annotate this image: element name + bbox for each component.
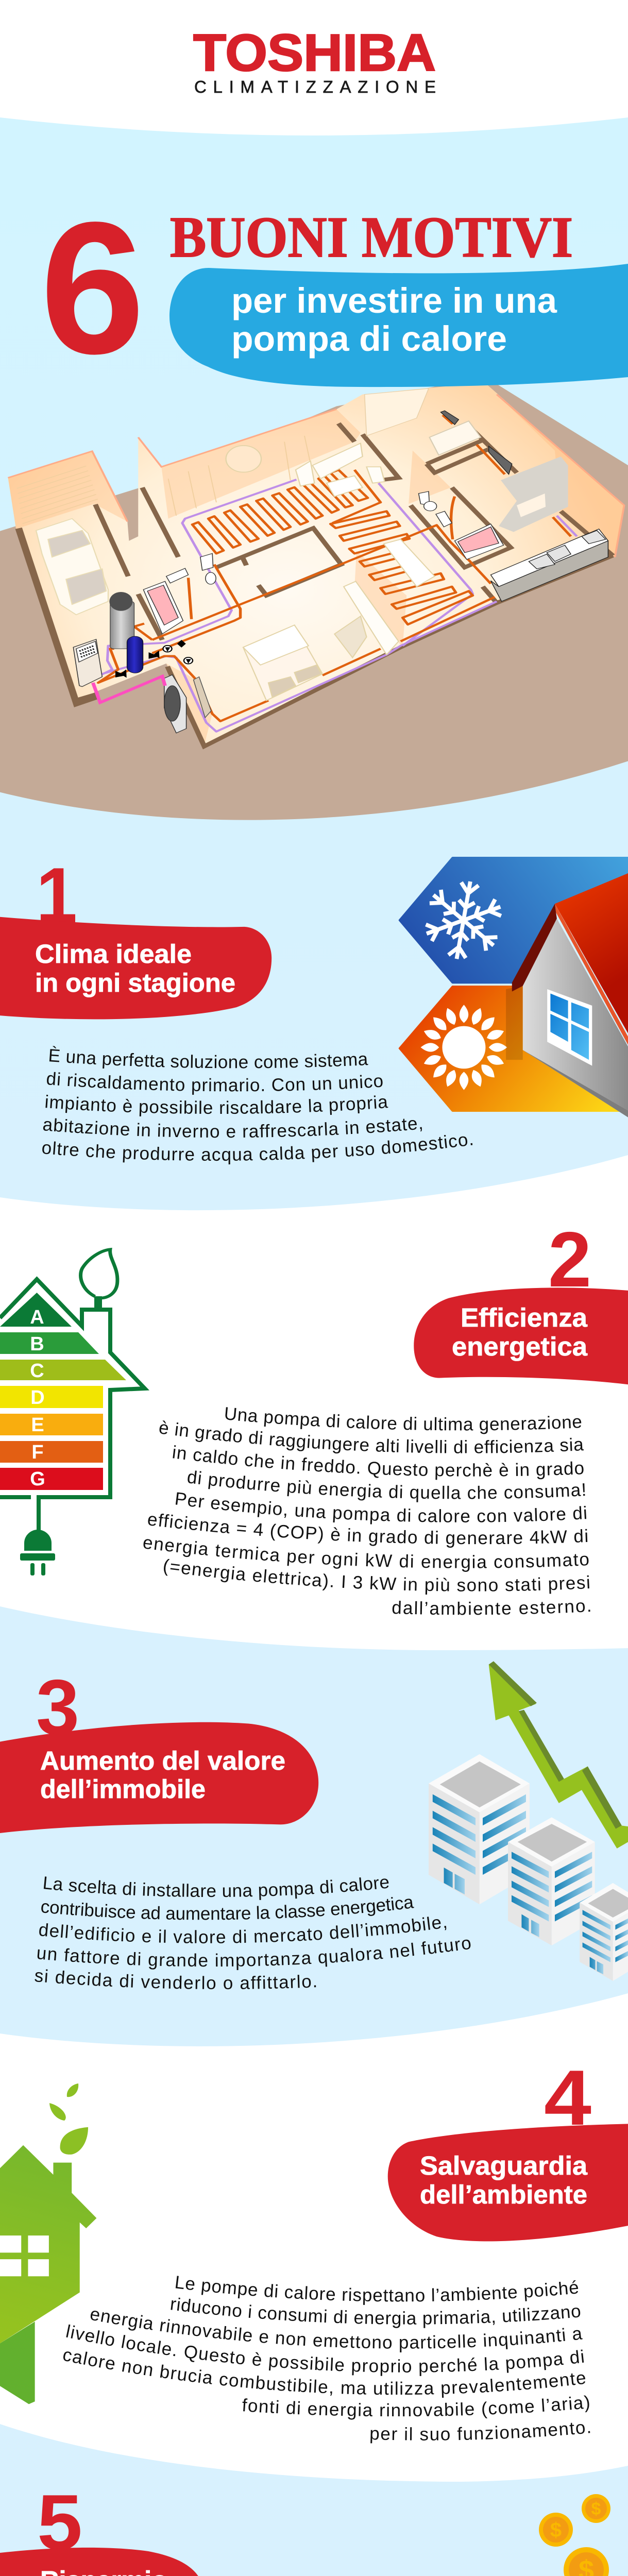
body text: reason 2: in caldo che in freddo. Questo perchè è in grado [173, 1445, 584, 1480]
radiator [194, 677, 211, 718]
orange pipes [98, 415, 571, 721]
body text: reason 4: energia rinnovabile e non emettono particelle inquinanti a [91, 2311, 583, 2352]
body text: reason 1: oltre che produrre acqua calda per uso domestico. [42, 1135, 473, 1164]
house [506, 873, 628, 1117]
body text: reason 3: si decida di venderlo o affittarlo. [35, 1969, 316, 1990]
snowflake [419, 875, 508, 965]
heading banner: aumento del valore: Aumento del valore [40, 1746, 285, 1775]
title: buoni motivi: BUONI MOTIVI [170, 206, 573, 269]
icon: house with winter and summer [400, 858, 628, 1117]
logo: Toshiba Climatizzazione: CLIMATIZZAZIONE [194, 77, 436, 96]
panel: reason 5 [0, 2479, 628, 2576]
floor and walls [8, 383, 624, 745]
subtitle banner: pompa di calore [231, 319, 507, 359]
body text: reason 2: energia termica per ogni kW di energia consumato [143, 1539, 588, 1572]
body text: reason 1: È una perfetta soluzione come sistema [49, 1046, 368, 1069]
body text: reason 1: impianto è possibile riscaldare la propria [45, 1094, 388, 1116]
building 2 [508, 1817, 595, 1945]
body text: reason 2 [143, 1407, 590, 1615]
bathrooms [143, 492, 503, 634]
heading banner: risparmio in bolletta [0, 2548, 203, 2576]
logo: Toshiba Climatizzazione: TOSHIBA [193, 24, 436, 82]
numeral 2: 2 [548, 1216, 591, 1303]
blue background band: intro and reason 1 [0, 117, 628, 1210]
wall translucent tints [8, 395, 624, 745]
heading banner: clima ideale: in ogni stagione [35, 968, 235, 997]
class letters: F [31, 1442, 44, 1463]
body text: reason 4: fonti di energia rinnovabile (come l’aria) [242, 2396, 589, 2420]
class letters [30, 1307, 45, 1490]
body text: reason 3: La scelta di installare una pompa di calore [43, 1876, 388, 1900]
blue background band: reason 3 [0, 1606, 628, 2046]
expansion vessel [127, 636, 143, 673]
sun [420, 1005, 507, 1090]
building 3 [580, 1883, 628, 1981]
underfloor heating loops [192, 470, 473, 624]
numeral 5: 5 [37, 2479, 82, 2566]
icon: energy class house with plug [0, 1249, 145, 1575]
numeral 3: 3 [36, 1664, 79, 1751]
heading banner: salvaguardia dell'ambiente: Salvaguardia [420, 2151, 588, 2180]
bedroom [243, 625, 323, 701]
body text: reason 2: è in grado di raggiungere alti livelli di efficienza sia [160, 1420, 584, 1454]
ground [0, 377, 628, 820]
house [0, 2145, 96, 2404]
dark wall bases [15, 528, 100, 707]
panel: reason 4 [0, 2054, 628, 2445]
heading banner: efficienza energetica [414, 1287, 628, 1384]
building 1 [429, 1754, 530, 1904]
heading banner: efficienza energetica: Efficienza [461, 1303, 588, 1332]
coins: $ [591, 2499, 601, 2519]
garage door hatch [17, 436, 313, 523]
class letters: G [30, 1468, 45, 1490]
leaves [49, 2083, 78, 2121]
leaf [81, 1249, 117, 1298]
icon: piggy bank with coins [497, 2494, 628, 2576]
upper bedroom and radiators [365, 388, 512, 474]
heading banner: aumento del valore [0, 1722, 318, 1833]
illustration: house floorplan with heat pump system [0, 377, 628, 820]
plug [20, 1495, 55, 1575]
body text: reason 1 [42, 1046, 473, 1164]
heading banner: aumento del valore: dell’immobile [40, 1774, 206, 1804]
class letters: A [30, 1307, 44, 1328]
body text: reason 1: abitazione in inverno e raffrescarla in estate, [43, 1118, 422, 1138]
numeral 1: 1 [36, 852, 77, 939]
class bars [0, 1293, 72, 1327]
body text: reason 2: dall’ambiente esterno. [393, 1601, 590, 1615]
body text: reason 3: dell’edificio e il valore di mercato dell’immobile, [39, 1917, 446, 1943]
living room furniture [226, 443, 435, 657]
body text: reason 3: un fattore di grande importanza qualora nel futuro [37, 1939, 471, 1970]
indoor unit [73, 639, 102, 687]
title numeral 6: 6 [40, 183, 145, 393]
heading banner: salvaguardia dell'ambiente: dell’ambiente [420, 2180, 587, 2209]
body text: reason 2: Per esempio, una pompa di calore con valore di [175, 1492, 586, 1524]
house outline [0, 1279, 145, 1497]
body text: reason 4: per il suo funzionamento. [370, 2422, 590, 2443]
body text: reason 3: contribuisce ad aumentare la classe energetica [41, 1897, 414, 1920]
panel: reason 3 [0, 1661, 628, 1990]
panel: reason 2 [0, 1216, 628, 1615]
class letters: E [31, 1414, 44, 1436]
body text: reason 4: riducono i consumi di energia primaria, utilizzano [171, 2298, 580, 2328]
class letters: B [30, 1333, 44, 1355]
refrigerant pipe [93, 676, 165, 703]
body text: reason 4: Le pompe di calore rispettano l’ambiente poiché [175, 2276, 578, 2305]
subtitle banner [169, 264, 628, 387]
wall tops [8, 395, 624, 557]
purple pipes [100, 480, 577, 732]
heading banner: salvaguardia dell'ambiente [388, 2124, 628, 2241]
class letters: D [30, 1387, 45, 1409]
heading banner: clima ideale [0, 917, 271, 1019]
outdoor unit [164, 675, 186, 733]
kitchen [491, 456, 608, 601]
heading banner: efficienza energetica: energetica [452, 1332, 588, 1361]
panel: reason 1 [0, 852, 628, 1164]
class letters: C [30, 1360, 44, 1382]
icon: rising arrow [489, 1661, 628, 1849]
body text: reason 4: livello locale. Questo è possibile proprio perché la pompa di [66, 2325, 584, 2376]
icon: green house with leaves [0, 2083, 96, 2404]
numeral 4: 4 [544, 2054, 591, 2142]
coins [539, 2494, 610, 2576]
body text: reason 2: (=energia elettrica). I 3 kW in più sono stati presi [164, 1559, 589, 1595]
car [36, 519, 108, 615]
valves and pumps [115, 640, 193, 677]
body text: reason 1: di riscaldamento primario. Con un unico [47, 1072, 383, 1095]
body text: reason 2: Una pompa di calore di ultima generazione [225, 1407, 581, 1434]
hot water tank [109, 592, 134, 649]
body text: reason 2: efficienza = 4 (COP) è in grado di generare 4kW di [148, 1514, 587, 1548]
body text: reason 4 [61, 2272, 592, 2445]
body text: reason 4: calore non brucia combustibile, ma utilizza prevalentemente [63, 2351, 585, 2398]
body text: reason 3 [33, 1872, 472, 1993]
subtitle banner: per investire in una [231, 281, 557, 320]
heading banner: clima ideale: Clima ideale [35, 939, 192, 969]
icon: buildings [429, 1754, 628, 1981]
body text: reason 2: di produrre più energia di quella che consuma! [188, 1470, 585, 1502]
blue background band: reason 5 [0, 2424, 628, 2576]
coins: $ [550, 2519, 562, 2541]
